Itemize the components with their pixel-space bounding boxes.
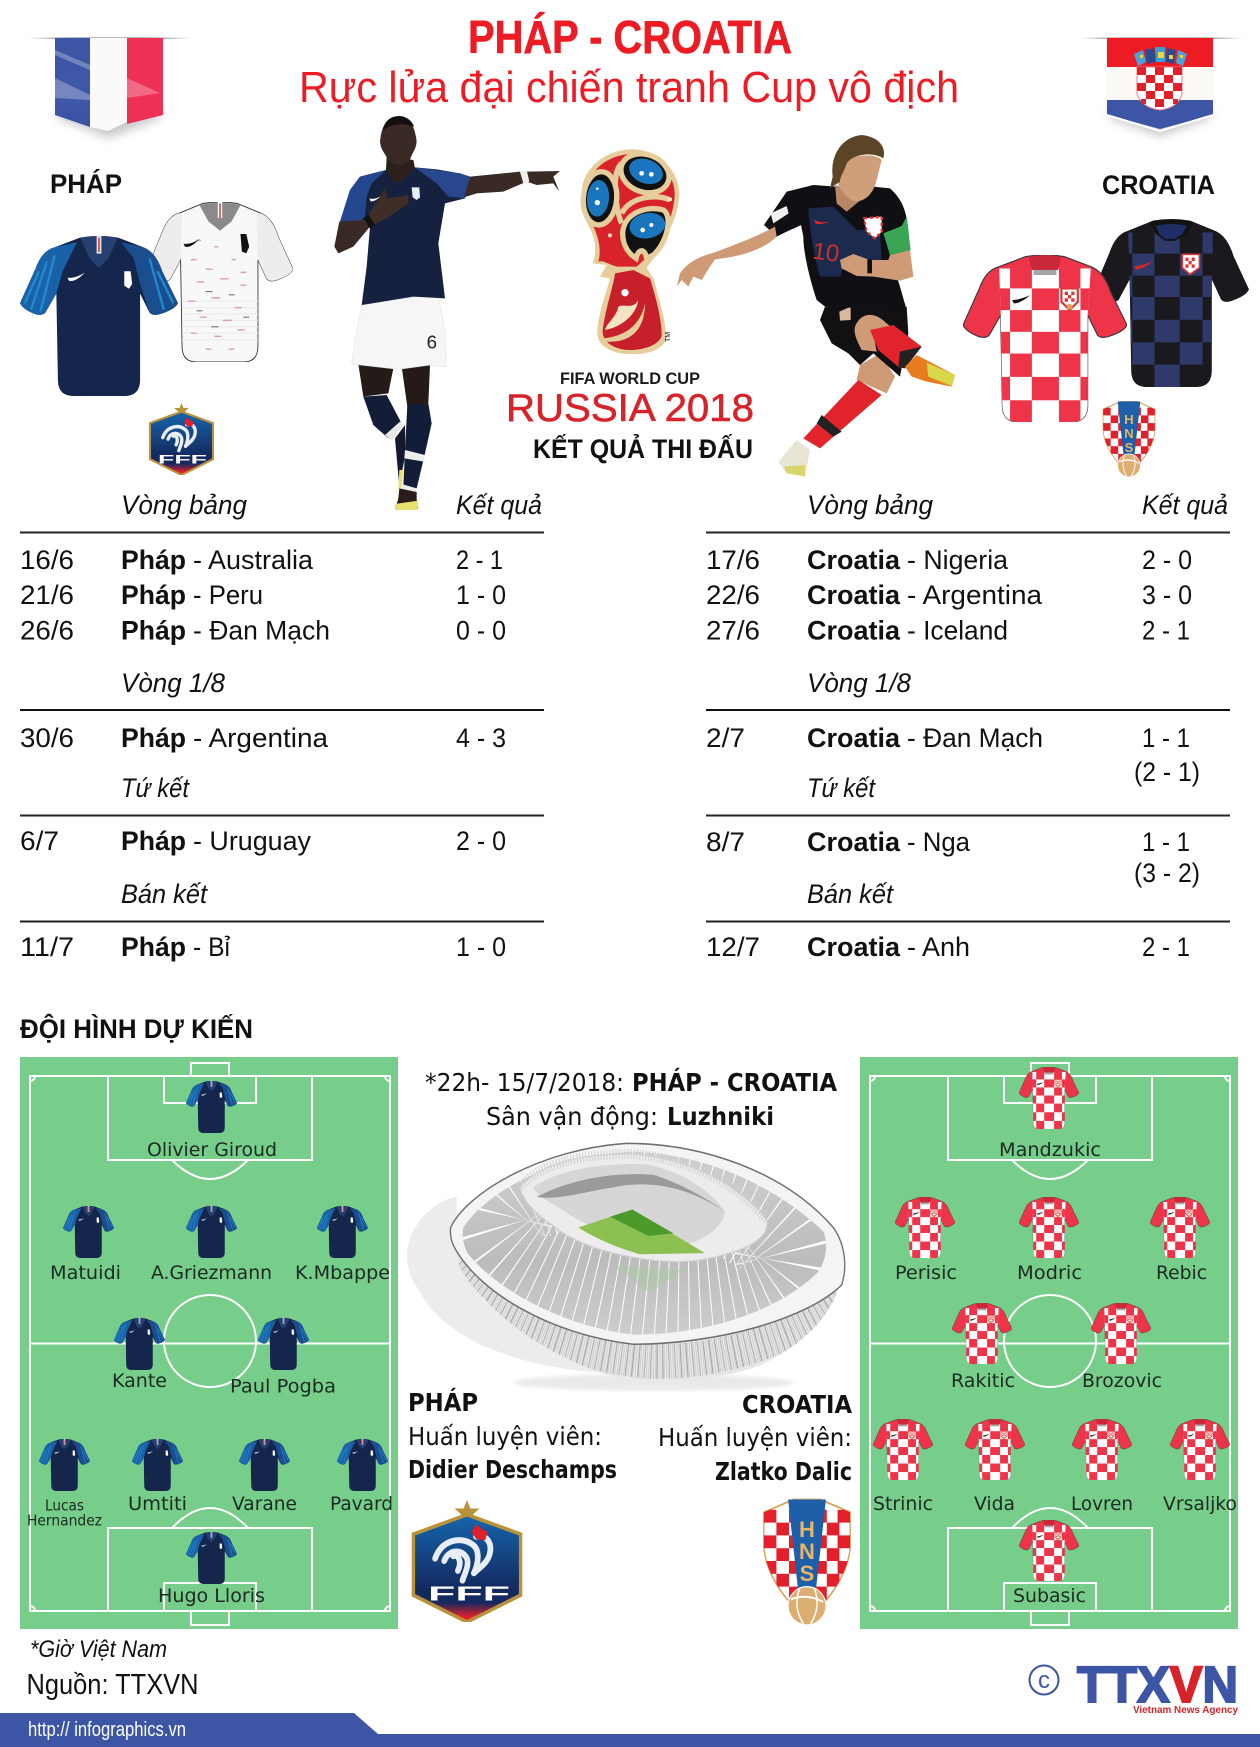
panel: Croatia results table: 2 - 1 (1142, 616, 1190, 646)
names: France players: Hernandez (27, 1512, 102, 1530)
panel: Croatia results table: 8/7 (706, 827, 745, 857)
panel: France results table: Pháp (121, 723, 186, 753)
panel: Croatia results table: 2 - 1 (1142, 932, 1190, 962)
panel: Croatia results table: (3 - 2) (1134, 858, 1200, 888)
icon: HNS crest small: H (1124, 412, 1134, 427)
panel: Croatia results table: Vòng bảng (807, 490, 933, 520)
footer bar (0, 1713, 1260, 1747)
coach: France: Huấn luyện viên: (408, 1422, 602, 1451)
names: France players: Kante (112, 1370, 167, 1392)
names: Croatia players: Modric (1017, 1262, 1082, 1284)
logo: TTXVN: TTXVN (1077, 1656, 1238, 1713)
panel: France results table: Pháp (121, 616, 186, 646)
panel: Croatia results table: (2 - 1) (1134, 757, 1200, 787)
label: trademark: TM (665, 332, 672, 342)
title (299, 11, 959, 112)
names: Croatia players: Rakitic (951, 1370, 1015, 1392)
panel: France results table: 4 - 3 (456, 723, 506, 753)
coach: France: Didier Deschamps (408, 1455, 617, 1484)
panel: France results table: 6/7 (20, 826, 59, 856)
names: France players: Hugo Lloris (158, 1585, 265, 1607)
panel: Croatia results table: - Anh (907, 932, 970, 962)
panel: France results table: 0 - 0 (456, 616, 506, 646)
panel: Croatia results table: 2/7 (706, 723, 745, 753)
coach: France (408, 1388, 617, 1484)
icon: FFF crest large (413, 1500, 521, 1622)
names: Croatia players: Brozovic (1082, 1370, 1162, 1392)
names: Croatia players: Rebic (1156, 1262, 1207, 1284)
match info: Luzhniki (667, 1102, 774, 1131)
panel: France results table: Kết quả (456, 490, 542, 520)
panel: Croatia results table: - Iceland (907, 616, 1008, 646)
label: PHÁP: PHÁP (50, 168, 122, 199)
panel: France results table: Pháp (121, 932, 186, 962)
heading: expected lineup: ĐỘI HÌNH DỰ KIẾN (20, 1013, 253, 1044)
panel: Croatia results table: - Đan Mạch (907, 723, 1043, 753)
jersey: France home (20, 236, 178, 396)
panel: France results table: 21/6 (20, 580, 74, 610)
panel: France results table (20, 490, 544, 962)
panel: France results table: 26/6 (20, 616, 74, 646)
names: France players: Lucas (45, 1496, 84, 1514)
panel: Croatia results table: 27/6 (706, 616, 760, 646)
coach: Croatia: Huấn luyện viên: (658, 1423, 852, 1452)
icon: HNS crest large: H (799, 1517, 815, 1542)
panel: Croatia results table: 12/7 (706, 932, 760, 962)
panel: France results table: 2 - 0 (456, 826, 506, 856)
panel: France results table: - Bỉ (193, 932, 230, 962)
panel: Croatia results table: Croatia (807, 545, 901, 575)
names: Croatia players: Perisic (895, 1262, 957, 1284)
panel: France results table: 2 - 1 (456, 545, 503, 575)
match info: *22h- 15/7/2018: (425, 1068, 624, 1097)
icon: HNS crest small: S (1125, 440, 1134, 455)
panel: Croatia results table: Bán kết (807, 879, 894, 909)
panel: Croatia results table: 22/6 (706, 580, 760, 610)
flag: Croatia (1080, 38, 1243, 136)
names: Croatia players: Mandzukic (999, 1139, 1101, 1161)
jersey: Croatia away (1094, 219, 1249, 387)
names: Croatia players: Strinic (873, 1493, 933, 1515)
panel: Croatia results table: - Nigeria (907, 545, 1009, 575)
panel: France results table: Vòng bảng (121, 490, 247, 520)
stadium pitch (578, 1210, 705, 1293)
icon: HNS crest large: N (799, 1539, 815, 1564)
names: Croatia players: Vrsaljko (1163, 1493, 1237, 1515)
panel: Croatia results table (706, 490, 1230, 962)
stadium: Luzhniki (407, 1143, 845, 1391)
names: France players: Pavard (330, 1493, 393, 1515)
panel: France results table: Tứ kết (121, 773, 190, 803)
panel: Croatia results table: 2 - 0 (1142, 545, 1192, 575)
panel: France results table: - Peru (193, 580, 263, 610)
panel: France results table: 16/6 (20, 545, 74, 575)
coach: France: PHÁP (408, 1388, 478, 1417)
panel: Croatia results table: 3 - 0 (1142, 580, 1192, 610)
panel: Croatia results table: Vòng 1/8 (807, 668, 911, 698)
footnote: *Giờ Việt Nam (30, 1636, 167, 1663)
icon: World Cup trophy (581, 147, 679, 354)
player: Modric: 10 (811, 238, 841, 268)
logo text: FIFA World Cup Russia 2018 (506, 369, 754, 430)
panel: Croatia results table: Tứ kết (807, 773, 876, 803)
names: France players (27, 1139, 393, 1607)
names: France players: Matuidi (50, 1262, 121, 1284)
names: France players: Umtiti (128, 1493, 187, 1515)
jersey: France away (147, 202, 293, 362)
title: PHÁP - CROATIA (468, 11, 792, 63)
title: Rực lửa đại chiến tranh Cup vô địch (299, 63, 959, 112)
panel: Croatia results table: Croatia (807, 932, 901, 962)
panel: France pitch (20, 1057, 398, 1629)
panel: Croatia results table: Croatia (807, 723, 901, 753)
flag: France (28, 38, 191, 138)
panel: Croatia results table: - Nga (907, 827, 971, 857)
logo: TTXVN: c (1038, 1667, 1050, 1694)
icon: coat of arms (1134, 47, 1187, 110)
panel: Croatia results table: Croatia (807, 580, 901, 610)
icon: HNS crest large: S (800, 1561, 814, 1586)
panel: France results table: 11/7 (20, 932, 74, 962)
icon: HNS crest small: N (1124, 426, 1134, 441)
coach: Croatia: Zlatko Dalic (715, 1457, 852, 1486)
panel: France results table: 1 - 0 (456, 580, 506, 610)
panel: France results table: 1 - 0 (456, 932, 506, 962)
panel: France results table: Bán kết (121, 879, 208, 909)
names: France players: Varane (232, 1493, 297, 1515)
coach: Croatia: CROATIA (742, 1390, 853, 1419)
icon: FFF crest small (150, 403, 213, 475)
names: France players: Paul Pogba (230, 1376, 336, 1398)
panel: France results table: - Australia (193, 545, 314, 575)
icon: FFF crest small: FFF (158, 452, 207, 466)
panel: France results table: Pháp (121, 826, 186, 856)
coach: Croatia (658, 1390, 853, 1486)
panel: France results table: - Argentina (193, 723, 329, 753)
match info: PHÁP - CROATIA (632, 1068, 838, 1097)
logo text: FIFA World Cup Russia 2018: FIFA WORLD CUP (560, 369, 700, 388)
match info (425, 1068, 838, 1131)
names: Croatia players: Vida (974, 1493, 1015, 1515)
names: France players: A.Griezmann (151, 1262, 272, 1284)
label: CROATIA: CROATIA (1102, 170, 1215, 200)
panel: Croatia results table: 1 - 1 (1142, 723, 1190, 753)
player: Pogba: 6 (427, 331, 437, 352)
icon: FFF crest large: FFF (428, 1584, 510, 1606)
names: Croatia players: Lovren (1071, 1493, 1133, 1515)
panel: Croatia results table: Croatia (807, 827, 901, 857)
names: Croatia players (873, 1139, 1237, 1607)
panel: Croatia results table: 1 - 1 (1142, 827, 1190, 857)
match info: Sân vận động: (486, 1102, 658, 1131)
panel: France results table: - Đan Mạch (193, 616, 330, 646)
jersey: Croatia home (963, 255, 1127, 422)
names: France players: K.Mbappe (295, 1262, 390, 1284)
source: Nguồn: TTXVN (26, 1669, 198, 1701)
names: Croatia players: Subasic (1013, 1585, 1086, 1607)
icon: HNS crest small (1103, 402, 1155, 477)
panel: France results table: Pháp (121, 580, 186, 610)
logo: TTXVN: Vietnam News Agency (1133, 1705, 1238, 1716)
logo text: FIFA World Cup Russia 2018: RUSSIA 2018 (506, 387, 754, 430)
panel: France results table: Vòng 1/8 (121, 668, 225, 698)
jerseys: France players (39, 1081, 388, 1584)
heading: match results: KẾT QUẢ THI ĐẤU (533, 432, 753, 464)
footer bar: http:// infographics.vn (28, 1719, 186, 1741)
panel: Croatia results table: - Argentina (907, 580, 1043, 610)
icon: HNS crest large (764, 1500, 850, 1625)
panel: Croatia results table: Croatia (807, 616, 901, 646)
panel: Croatia results table: Kết quả (1142, 490, 1228, 520)
panel: Croatia pitch (860, 1057, 1238, 1629)
player: Pogba (334, 116, 560, 510)
panel: Croatia results table: 17/6 (706, 545, 760, 575)
panel: France results table: - Uruguay (193, 826, 311, 856)
names: France players: Olivier Giroud (147, 1139, 277, 1161)
jerseys: Croatia players (873, 1067, 1230, 1581)
player: Modric (677, 135, 955, 477)
panel: France results table: Pháp (121, 545, 186, 575)
panel: France results table: 30/6 (20, 723, 74, 753)
